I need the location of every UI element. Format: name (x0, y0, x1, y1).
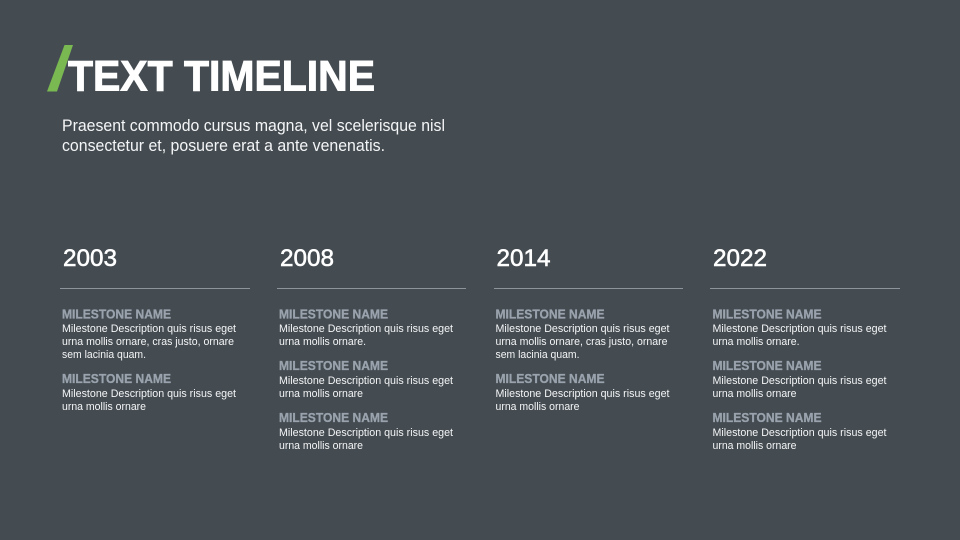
milestone 2: urna mollis ornare (712, 388, 796, 400)
milestone 2: MILESTONE NAME (279, 359, 388, 373)
milestone 2 (496, 372, 670, 413)
milestone 1: Milestone Description quis risus eget (62, 323, 236, 335)
milestone 2 (62, 372, 236, 413)
milestone 3: MILESTONE NAME (279, 411, 388, 425)
subtitle: Praesent commodo cursus magna, vel scelerisque nisl (62, 117, 445, 135)
subtitle (62, 117, 445, 155)
milestone 3: Milestone Description quis risus eget (279, 427, 453, 439)
milestone 2: MILESTONE NAME (62, 372, 171, 386)
milestone 2: Milestone Description quis risus eget (279, 375, 453, 387)
milestone 1: urna mollis ornare. (279, 336, 366, 348)
milestone 2: urna mollis ornare (496, 401, 580, 413)
milestone 3: urna mollis ornare (279, 440, 363, 452)
milestone 2: MILESTONE NAME (496, 372, 604, 386)
milestone 1: MILESTONE NAME (279, 308, 388, 322)
milestone 1: sem lacinia quam. (496, 349, 580, 361)
milestone 3: urna mollis ornare (712, 440, 796, 452)
title: TEXT TIMELINE (68, 54, 375, 100)
year 2014: 2014 (496, 245, 550, 272)
milestone 1: sem lacinia quam. (62, 349, 146, 361)
milestone 1: Milestone Description quis risus eget (279, 323, 453, 335)
panel: 2008 (277, 245, 466, 452)
milestone 1 (496, 308, 670, 361)
milestone 2: urna mollis ornare (279, 388, 363, 400)
year 2022: 2022 (713, 245, 767, 272)
milestone 1 (279, 308, 453, 348)
milestone 2: MILESTONE NAME (712, 359, 822, 373)
milestone 2 (712, 359, 886, 400)
panel: 2022 (710, 245, 900, 452)
milestone 3: Milestone Description quis risus eget (712, 427, 886, 439)
year 2008: 2008 (280, 245, 334, 272)
year 2003: 2003 (63, 245, 117, 272)
milestone 1: MILESTONE NAME (496, 308, 604, 322)
milestone 1: urna mollis ornare. (712, 336, 800, 348)
milestone 2: urna mollis ornare (62, 401, 146, 413)
milestone 1: Milestone Description quis risus eget (712, 323, 886, 335)
icon: green slash (47, 45, 73, 92)
milestone 2: Milestone Description quis risus eget (62, 388, 236, 400)
milestone 3 (279, 411, 453, 452)
milestone 1: Milestone Description quis risus eget (496, 323, 670, 335)
milestone 2: Milestone Description quis risus eget (712, 375, 886, 387)
milestone 1: MILESTONE NAME (712, 308, 822, 322)
milestone 2 (279, 359, 453, 400)
subtitle: consectetur et, posuere erat a ante venenatis. (62, 137, 385, 155)
milestone 1 (62, 308, 236, 361)
milestone 1: urna mollis ornare, cras justo, ornare (62, 336, 234, 348)
milestone 1: MILESTONE NAME (62, 308, 171, 322)
milestone 3: MILESTONE NAME (712, 411, 822, 425)
milestone 1: urna mollis ornare, cras justo, ornare (496, 336, 668, 348)
milestone 3 (712, 411, 886, 452)
panel: 2014 (494, 245, 683, 413)
milestone 1 (712, 308, 886, 348)
panel: 2003 (60, 245, 250, 413)
milestone 2: Milestone Description quis risus eget (496, 388, 670, 400)
